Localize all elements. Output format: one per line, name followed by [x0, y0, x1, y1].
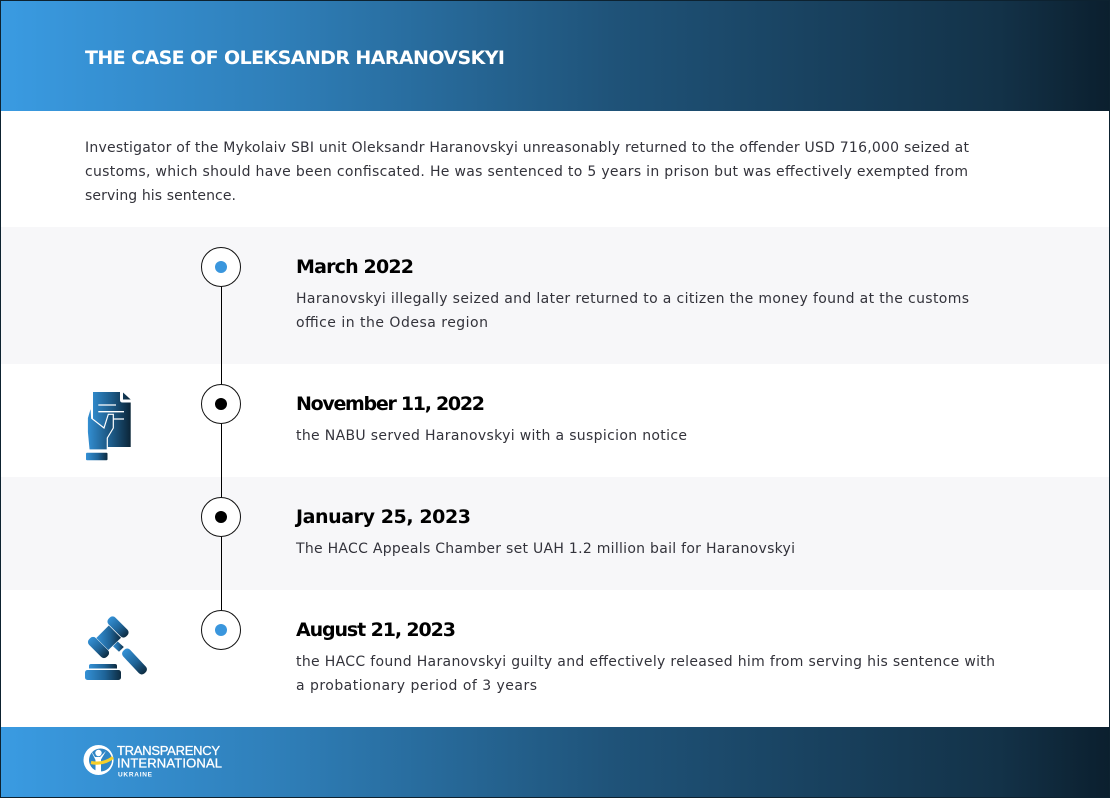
intro text: Investigator of the Mykolaiv SBI unit Oleksandr Haranovskyi unreasonably returned to the offender USD 716,000 seized at — [85, 140, 970, 156]
event: August 21, 2023: a probationary period of 3 years — [296, 678, 537, 694]
header banner — [0, 0, 1110, 111]
timeline axis — [220, 267, 222, 630]
event: January 25, 2023 — [294, 506, 795, 557]
logo: Transparency International Ukraine: INTERNATIONAL — [117, 756, 222, 770]
intro text: serving his sentence. — [85, 188, 236, 204]
footer banner — [0, 727, 1110, 798]
event: November 11, 2022: November 11, 2022 — [296, 393, 485, 415]
logo: Transparency International Ukraine: UKRAINE — [118, 772, 153, 778]
event: August 21, 2023: August 21, 2023 — [296, 619, 456, 641]
icon: judge gavel — [85, 615, 149, 680]
event: November 11, 2022: the NABU served Haranovskyi with a suspicion notice — [296, 428, 687, 444]
logo: Transparency International Ukraine — [84, 743, 222, 778]
event: August 21, 2023 — [296, 619, 995, 694]
icon: hand holding document — [86, 392, 131, 460]
event: November 11, 2022 — [296, 393, 687, 444]
intro text — [85, 140, 970, 204]
event: August 21, 2023: the HACC found Haranovskyi guilty and effectively released him from serving his sentence with — [296, 654, 995, 670]
band: January 2023 background — [0, 477, 1110, 590]
logo: Transparency International Ukraine: TRANSPARENCY — [117, 743, 220, 758]
intro text: customs, which should have been confiscated. He was sentenced to 5 years in prison but was effectively exempted from — [85, 164, 968, 180]
band: March 2022 background — [0, 227, 1110, 364]
timeline marker: March 2022 — [202, 248, 240, 286]
event: March 2022: March 2022 — [296, 256, 414, 278]
event: March 2022: Haranovskyi illegally seized and later returned to a citizen the money found at the customs — [296, 291, 969, 307]
event: January 25, 2023: The HACC Appeals Chamber set UAH 1.2 million bail for Haranovskyi — [295, 541, 795, 557]
timeline marker: January 25, 2023 — [202, 498, 240, 536]
timeline marker: November 11, 2022 — [202, 384, 240, 424]
title: THE CASE OF OLEKSANDR HARANOVSKYI — [85, 47, 505, 69]
timeline marker: August 21, 2023 — [202, 610, 240, 650]
event: January 25, 2023: January 25, 2023 — [294, 506, 471, 528]
event: March 2022 — [296, 256, 969, 331]
event: March 2022: office in the Odesa region — [296, 315, 488, 331]
